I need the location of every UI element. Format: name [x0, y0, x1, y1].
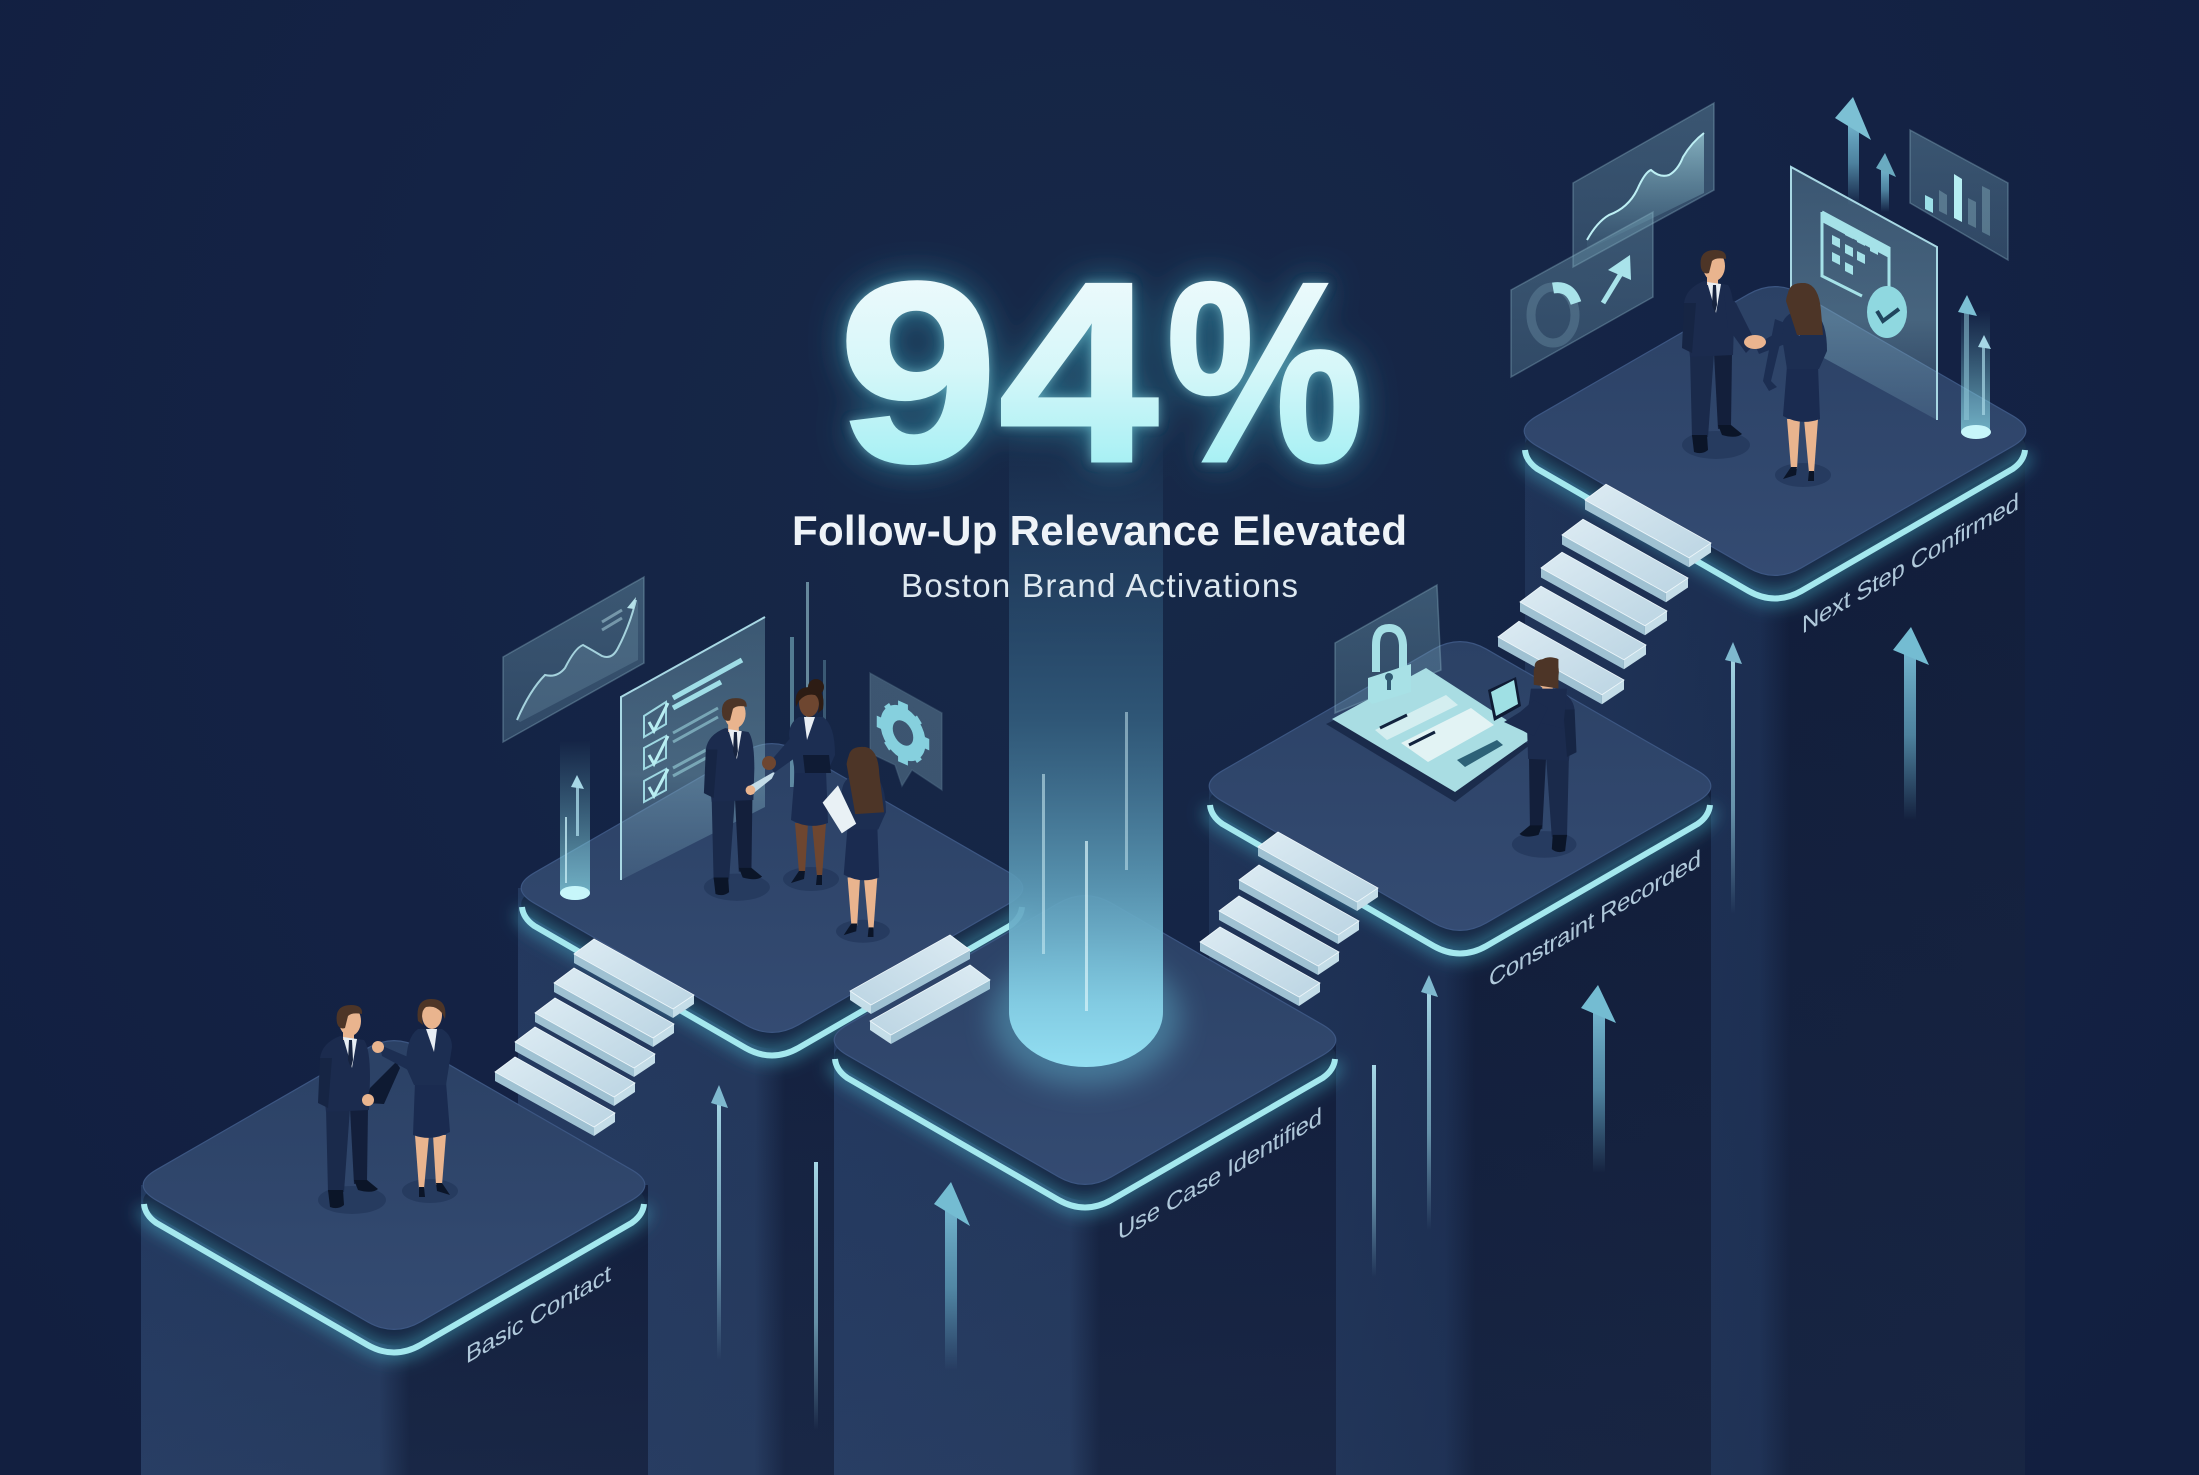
figure: man with tablet seen from behind	[1512, 657, 1576, 858]
column: constraint recorded	[1209, 786, 1711, 1475]
scene: next step panels	[1511, 97, 2008, 487]
icon: glowing cylinder with arrows	[1958, 295, 1991, 439]
figure: woman gesturing	[372, 999, 458, 1203]
column: follow-up step two	[518, 888, 1022, 1475]
scene: constraint step	[1326, 585, 1576, 858]
panel: gear icon	[870, 673, 942, 790]
headline: 94%: %	[1166, 228, 1364, 515]
label: constraint recorded: Constraint Recorded	[1489, 845, 1701, 994]
column: next step confirmed	[1525, 431, 2025, 1475]
icon: glowing cylinder with arrow	[560, 740, 590, 900]
platform: basic contact	[143, 1041, 645, 1352]
stairs: second step to use case	[850, 935, 990, 1044]
figure: woman shaking hands	[1755, 283, 1831, 487]
figure: man with tablet	[318, 1005, 400, 1214]
headline: 94%	[838, 228, 1364, 516]
panel: glass lock pane	[1335, 585, 1441, 713]
figure: man shaking hands	[1682, 250, 1756, 459]
panel: area chart	[1573, 103, 1714, 267]
platform: use case identified	[834, 896, 1336, 1208]
stairs: basic contact to second step	[495, 939, 694, 1136]
platform: constraint recorded	[1209, 642, 1711, 954]
column: use case identified	[834, 1040, 1336, 1475]
icon: handshake	[1744, 335, 1766, 349]
arrow: rising arrow under next step	[1893, 627, 1929, 820]
stairs: use case to constraint	[1200, 832, 1378, 1006]
light streaks behind people	[790, 582, 826, 787]
scene: basic contact people	[318, 999, 458, 1214]
arrow: thin rising arrow on constraint column	[1421, 975, 1438, 1230]
platform: next step confirmed	[1524, 287, 2026, 598]
subtitle: boston brand activations: Boston Brand Activations	[901, 567, 1298, 604]
arrow: thin rising arrow on second column	[711, 1085, 728, 1360]
panel: donut and arrow	[1511, 212, 1653, 377]
arrow: small up arrow	[1876, 153, 1896, 212]
arrow: thin rising arrow behind constraint step	[1725, 642, 1742, 914]
column: basic contact	[141, 1185, 648, 1475]
headline: 94%: 94	[838, 229, 1160, 516]
line: thin vertical light right	[1372, 1065, 1376, 1277]
arrow: large up arrow	[1835, 97, 1871, 205]
panel: bar chart	[1910, 130, 2008, 260]
light beam	[991, 430, 1181, 1086]
line: thin vertical light	[814, 1162, 818, 1430]
panel: line chart	[503, 577, 644, 742]
figure: woman from behind with document	[823, 747, 890, 943]
arrow: rising arrow under constraint recorded	[1581, 985, 1616, 1173]
label: use case identified: Use Case Identified	[1118, 1103, 1322, 1247]
label: basic contact: Basic Contact	[466, 1259, 612, 1370]
icon: handheld tablet	[1488, 677, 1548, 736]
label: next step confirmed: Next Step Confirmed	[1802, 488, 2019, 640]
form device	[1326, 668, 1533, 802]
scene: second step panels	[503, 577, 942, 943]
subtitle: follow-up relevance elevated: Follow-Up Relevance Elevated	[792, 507, 1407, 554]
icon: padlock	[1368, 628, 1411, 704]
stairs: constraint to next step	[1498, 484, 1711, 704]
panel: checklist	[621, 617, 765, 880]
panel: calendar	[1791, 167, 1937, 420]
figure: man with tablet	[704, 698, 776, 901]
figure: woman in centre	[762, 679, 839, 891]
platform: second step	[521, 744, 1023, 1056]
arrow: rising arrow under use case	[934, 1182, 970, 1370]
